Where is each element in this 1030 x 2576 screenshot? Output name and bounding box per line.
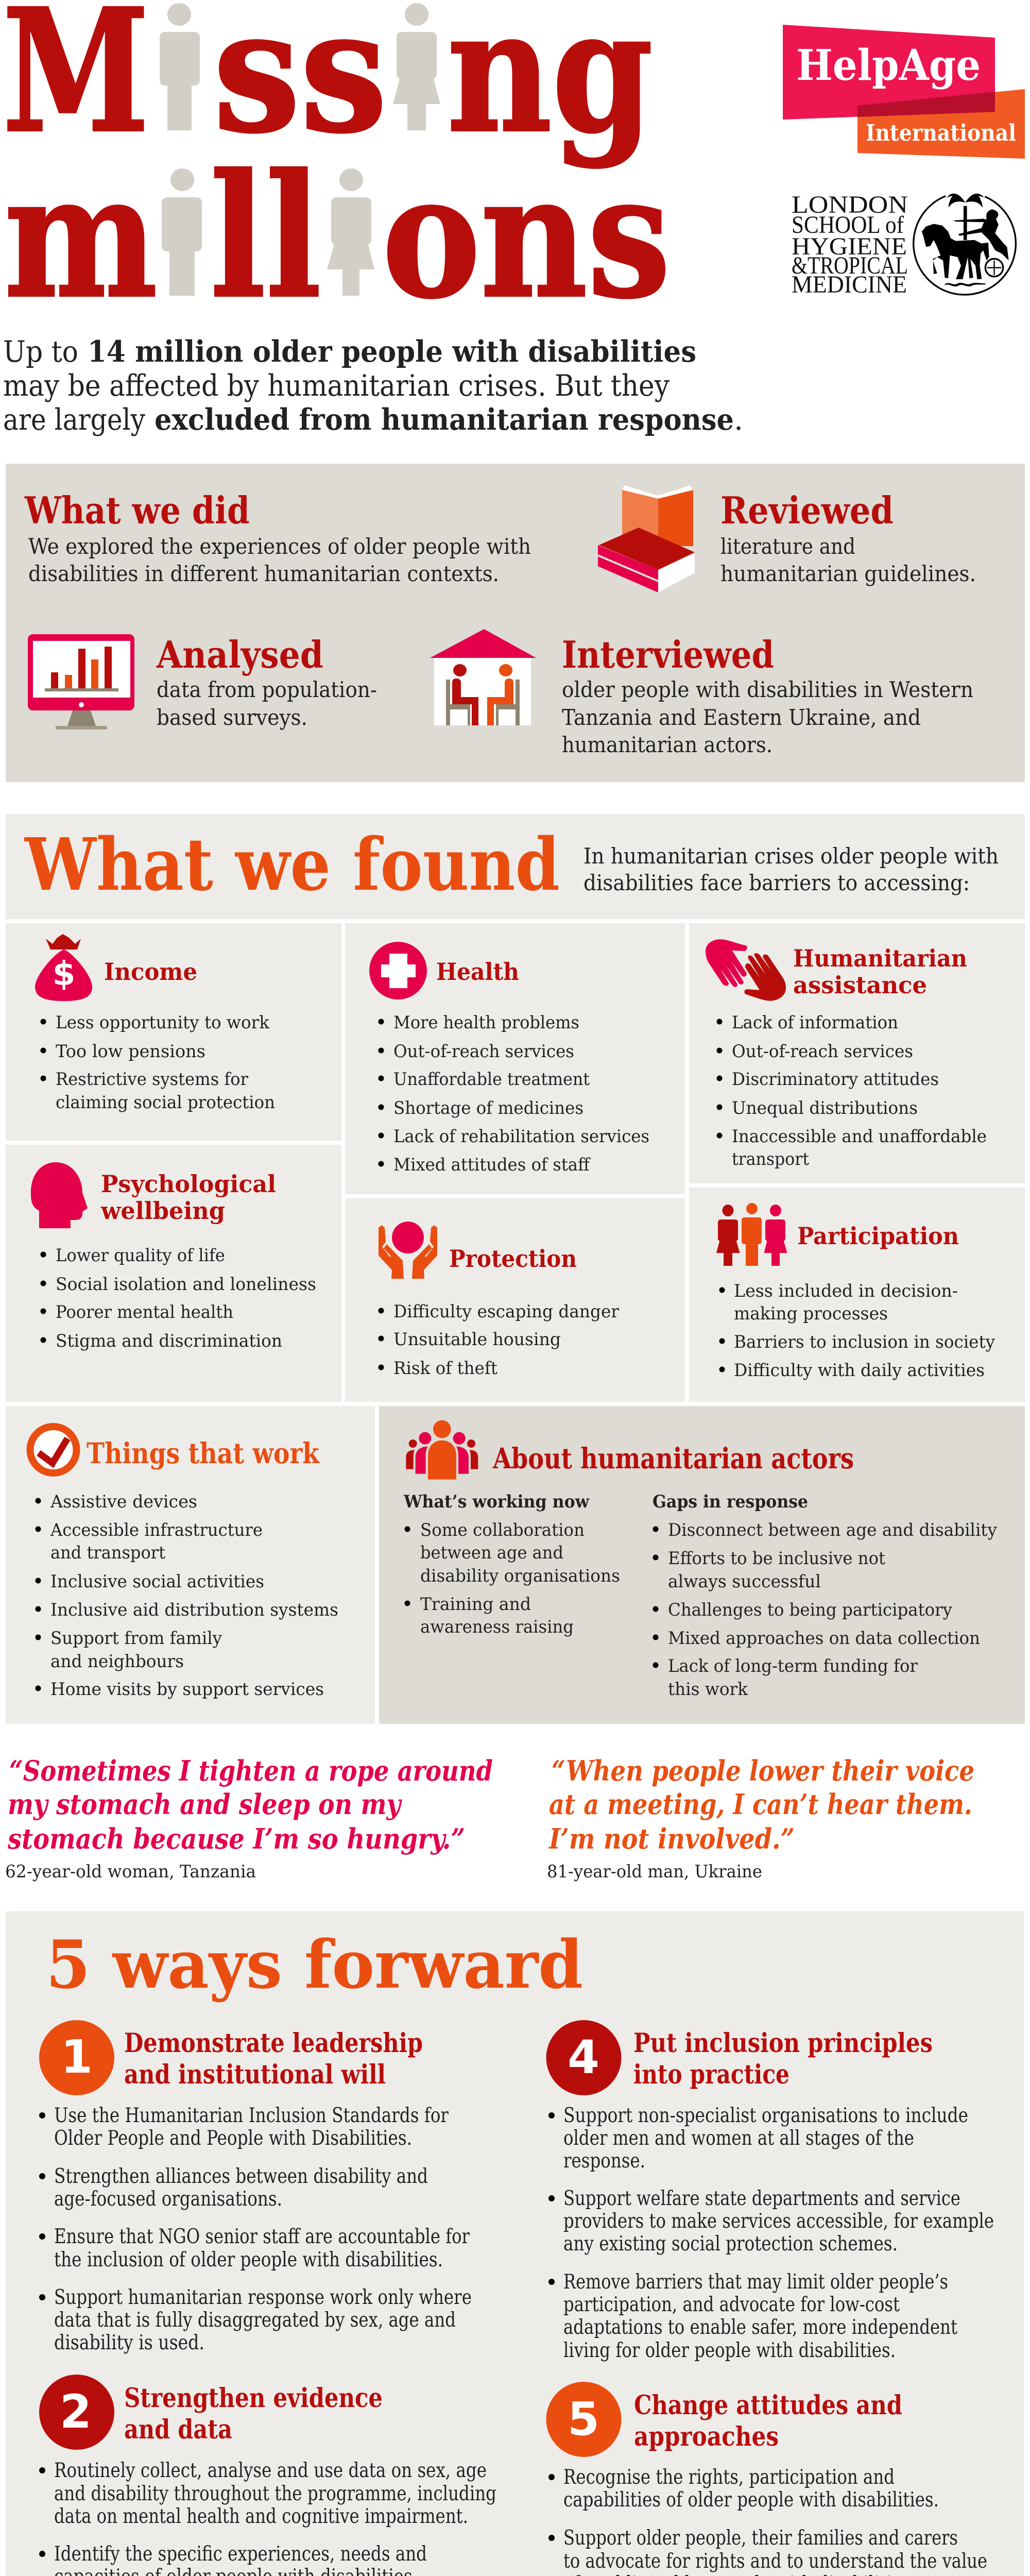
title: Missing millions [3,0,671,336]
icon: chariot seal [914,194,1016,295]
list: way 1: Ensure that NGO senior staff are accountable for [54,2225,470,2248]
panel: what we found header [6,814,1025,919]
list: way 4: participation, and advocate for low-cost [563,2293,900,2316]
intro text [3,334,743,437]
heading: way 1: Demonstrate leadership [124,2028,423,2059]
panel: about humanitarian actors [379,1406,1025,1724]
list: participation barriers: Difficulty with daily activities [734,1360,985,1381]
list: health barriers: Shortage of medicines [393,1098,583,1118]
quote: man, Ukraine: at a meeting, I can’t hear them. [549,1788,972,1821]
heading: psychological wellbeing: wellbeing [100,1197,225,1225]
list: way 2 [39,2459,496,2576]
list: way 1: the inclusion of older people with disabilities. [54,2248,443,2272]
heading: way 1 [124,2028,423,2090]
list: way 2: data on mental health and cognitive impairment. [54,2505,468,2528]
column: gaps in response [653,1492,998,1700]
heading: psychological wellbeing: Psychological [101,1170,276,1198]
logo: London School of Hygiene and Tropical Medicine: SCHOOL of [792,211,904,239]
list: health barriers: Unaffordable treatment [393,1069,590,1090]
icon: money bag: $ [53,955,75,993]
logo: HelpAge International [783,25,1025,159]
list: participation barriers: making processes [734,1303,888,1324]
heading: participation: Participation [797,1222,959,1250]
heading: what we found: What we found [24,823,560,907]
list: psychological barriers: Poorer mental health [56,1302,233,1323]
list: things that work [35,1492,338,1700]
block: interviewed: Interviewed [562,633,774,676]
number badge 5: 5 [568,2392,599,2446]
quote: man, Ukraine: I’m not involved.” [548,1822,795,1855]
list: way 5: Support older people, their families and carers [563,2527,958,2550]
column: what's working now: What’s working now [403,1492,590,1512]
block: analysed: data from population- [157,677,377,702]
heading: income: Income [104,958,197,986]
quote: woman, Tanzania: my stomach and sleep on my [8,1788,402,1821]
icon: two hands [706,939,786,1001]
title word: millions: m [4,138,158,336]
heading: what we did: What we did [24,488,250,532]
list: things that work: Inclusive social activities [50,1571,264,1592]
figure: man as letter i [162,168,202,296]
intro text: 14 million older people with disabilities [88,334,696,369]
logo: London School of Hygiene and Tropical Medicine: LONDON [792,191,908,218]
heading: way 2 [124,2383,383,2445]
list: health barriers: Out-of-reach services [393,1041,574,1062]
heading: way 5: Change attitudes and [634,2390,902,2421]
heading: way 4: into practice [633,2059,789,2090]
list: way 1 [39,2104,472,2354]
heading: way 4: Put inclusion principles [633,2028,933,2059]
logo: London School of Hygiene and Tropical Medicine: MEDICINE [792,271,907,298]
panel: things that work [6,1406,375,1724]
heading: protection: Protection [449,1245,577,1273]
block: interviewed: Tanzania and Eastern Ukraine, and [562,705,921,730]
list: way 1: data that is fully disaggregated by sex, age and [54,2309,456,2332]
quote: man, Ukraine [547,1754,974,1882]
quote: woman, Tanzania: stomach because I’m so hungry.” [7,1822,465,1855]
block: interviewed: humanitarian actors. [562,732,772,757]
list: psychological barriers: Social isolation and loneliness [56,1274,316,1295]
heading: way 2: and data [124,2414,232,2445]
quote: woman, Tanzania: 62-year-old woman, Tanzania [5,1861,256,1882]
icon: house with two people [430,629,536,725]
column: gaps in response: Mixed approaches on data collection [668,1628,980,1649]
quote: woman, Tanzania: “Sometimes I tighten a rope around [9,1754,493,1787]
number badge 5 [546,2382,621,2457]
panel: what we did [6,464,1025,782]
panel: health [345,923,685,1194]
heading: humanitarian assistance: assistance [793,971,927,999]
list: income barriers: Too low pensions [56,1041,205,1062]
heading: way 5: approaches [634,2421,779,2452]
icon: hands protecting [379,1222,437,1279]
list: psychological barriers [40,1245,316,1351]
icon: head [31,1162,88,1228]
list: way 4: living for older people with disabilities. [563,2339,896,2362]
text: what we did description [28,534,531,586]
list: assistance barriers: Out-of-reach services [732,1041,913,1062]
icon: monitor with bar chart [28,634,134,730]
column: what's working now: between age and [420,1543,563,1563]
heading: about humanitarian actors: About humanitarian actors [492,1442,854,1475]
block: analysed: based surveys. [157,705,307,730]
list: income barriers: Restrictive systems for [56,1069,249,1090]
list: way 2: Routinely collect, analyse and use data on sex, age [54,2459,487,2482]
logo: London School of Hygiene and Tropical Medicine: &TROPICAL [792,252,908,279]
list: way 4: older men and women at all stages of the [563,2127,914,2150]
logo: London School of Hygiene and Tropical Medicine: HYGIENE [792,233,907,260]
number badge 1 [39,2020,114,2095]
way 5 [546,2382,987,2576]
list: things that work: Accessible infrastructure [50,1520,263,1540]
figure: man as letter i [160,3,200,130]
way 1 [39,2020,472,2354]
column: what's working now: awareness raising [420,1617,574,1637]
text: what we did description: We explored the experiences of older people with [28,534,531,559]
list: participation barriers: Barriers to inclusion in society [734,1332,995,1352]
panel: income [6,923,341,1141]
list: health barriers: More health problems [393,1012,579,1033]
panel: protection [345,1198,685,1402]
list: way 5: capabilities of older people with disabilities. [563,2488,939,2512]
number badge 2 [39,2375,114,2450]
intro text: are largely [3,403,146,437]
block: analysed [156,633,377,730]
list: things that work: Inclusive aid distribution systems [50,1600,338,1620]
number badge 1: 1 [61,2030,93,2083]
list: way 1: Support humanitarian response work only where [54,2286,472,2309]
list: protection barriers: Unsuitable housing [393,1329,561,1350]
list: psychological barriers: Stigma and discrimination [56,1331,282,1351]
quote: man, Ukraine: “When people lower their voice [552,1754,974,1787]
heading: way 5 [634,2390,902,2452]
list: way 1: Older People and People with Disabilities. [54,2127,412,2150]
list: way 4: Remove barriers that may limit older people’s [563,2270,948,2294]
column: gaps in response: Gaps in response [653,1492,808,1512]
icon: three people [716,1203,787,1266]
block: interviewed: older people with disabilities in Western [562,677,973,702]
column: gaps in response: Lack of long-term funding for [668,1656,918,1676]
heading: psychological wellbeing [100,1170,276,1225]
list: income barriers: Less opportunity to work [56,1012,269,1033]
list: things that work: Home visits by support services [50,1679,324,1700]
number badge 2: 2 [60,2385,92,2438]
list: way 1: disability is used. [54,2331,204,2354]
column: what's working now: Training and [420,1594,531,1615]
text: barriers intro [583,843,999,895]
heading: humanitarian assistance [793,944,967,999]
list: way 4: any existing social protection schemes. [563,2232,898,2256]
block: interviewed [562,633,973,757]
title word: Missing [3,0,653,171]
heading: way 2: Strengthen evidence [124,2383,383,2414]
panel: psychological wellbeing [6,1145,341,1402]
logo: London School of Hygiene and Tropical Medicine [792,191,1016,298]
quote: man, Ukraine: 81-year-old man, Ukraine [547,1861,762,1882]
panel: participation [689,1188,1025,1402]
list: assistance barriers: Discriminatory attitudes [732,1069,939,1090]
icon: group of people [406,1420,478,1480]
column: gaps in response: Challenges to being participatory [668,1600,953,1620]
list: protection barriers: Risk of theft [393,1358,497,1379]
quote: woman, Tanzania [5,1754,493,1882]
intro text: Up to [3,335,78,369]
title word: millions: ons [382,138,671,336]
list: way 2: Identify the specific experiences, needs and [54,2543,427,2566]
block: reviewed [720,488,976,586]
list: way 5: Recognise the rights, participation and [563,2466,895,2489]
list: things that work: Support from family [50,1628,222,1649]
panel: 5 ways forward [6,1911,1024,2576]
logo: HelpAge International: HelpAge [796,41,981,90]
list: way 5 [548,2466,987,2576]
way 4 [546,2020,994,2362]
list: way 4: adaptations to enable safer, more independent [563,2316,957,2339]
list: things that work: Assistive devices [50,1492,197,1512]
intro text: . [734,403,743,437]
list: health barriers [378,1012,649,1175]
heading: way 4 [633,2028,933,2090]
icon: check mark [30,1427,76,1473]
way 2 [39,2375,496,2576]
title word: millions: ll [210,138,321,336]
list: things that work: and neighbours [50,1651,184,1672]
icon: books [598,485,695,592]
list: way 1: Use the Humanitarian Inclusion Standards for [54,2104,449,2127]
column: what's working now [403,1492,620,1637]
list: way 4 [548,2104,994,2362]
list: income barriers: claiming social protection [56,1092,275,1113]
heading: health: Health [436,958,519,986]
list: income barriers [40,1012,275,1113]
list: protection barriers [378,1301,620,1379]
text: barriers intro: disabilities face barriers to accessing: [583,870,970,895]
column: gaps in response: Disconnect between age and disability [668,1520,998,1540]
block: reviewed: humanitarian guidelines. [720,561,976,586]
title word: millions [4,138,671,336]
figure: woman as letter i [393,3,440,130]
column: what's working now: Some collaboration [420,1520,585,1540]
number badge 4: 4 [568,2030,599,2084]
list: things that work: and transport [50,1543,165,1563]
icon: health cross [369,942,427,999]
column: gaps in response: always successful [668,1571,821,1592]
list: participation barriers [719,1281,995,1381]
block: reviewed: Reviewed [720,488,894,532]
panel: humanitarian assistance [689,923,1025,1183]
text: barriers intro: In humanitarian crises older people with [583,843,999,869]
column: gaps in response: this work [668,1679,748,1700]
column: what's working now: disability organisations [420,1566,620,1586]
list: way 4: Support welfare state departments and service [563,2187,960,2210]
text: what we did description: disabilities in different humanitarian contexts. [28,561,499,586]
list: way 4: response. [563,2149,645,2173]
heading: humanitarian assistance: Humanitarian [793,944,967,972]
figure: woman as letter i [327,168,374,296]
list: way 1: Strengthen alliances between disability and [54,2165,428,2188]
intro text: excluded from humanitarian response [154,402,734,437]
intro text: may be affected by humanitarian crises. But they [3,369,670,403]
heading: way 1: and institutional will [124,2059,386,2090]
list: assistance barriers: Inaccessible and unaffordable [732,1126,987,1147]
icon: money bag [35,934,92,1001]
heading: 5 ways forward: 5 ways forward [46,1926,583,2004]
list: way 1: age-focused organisations. [54,2188,282,2211]
list: assistance barriers: transport [732,1149,809,1170]
logo: HelpAge International: International [866,120,1016,146]
block: analysed: Analysed [156,633,323,676]
list: way 2: and disability throughout the programme, including [54,2482,496,2505]
column: gaps in response: Efforts to be inclusive not [668,1548,885,1569]
list: assistance barriers: Lack of information [732,1012,898,1033]
heading: things that work: Things that work [87,1436,320,1470]
list: participation barriers: Less included in decision- [734,1281,958,1301]
list: assistance barriers: Unequal distributions [732,1098,918,1118]
list: health barriers: Lack of rehabilitation services [393,1126,649,1147]
block: reviewed: literature and [720,534,855,559]
list: assistance barriers [717,1012,987,1170]
list: protection barriers: Difficulty escaping danger [393,1301,620,1322]
list: health barriers: Mixed attitudes of staff [393,1155,591,1175]
list: psychological barriers: Lower quality of life [56,1245,225,1266]
number badge 4 [546,2020,621,2095]
